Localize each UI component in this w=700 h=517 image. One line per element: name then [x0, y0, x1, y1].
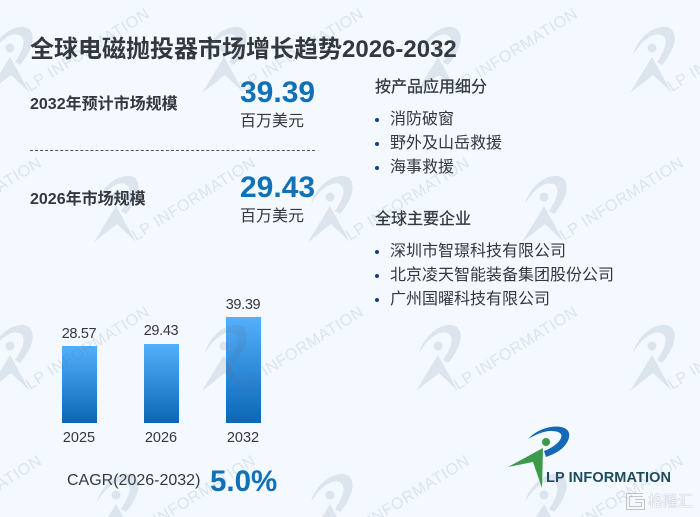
watermark pattern: LP INFORMATION	[557, 155, 687, 244]
CAGR callout	[67, 465, 277, 498]
stat: 2032 market size	[30, 76, 315, 130]
bar 2025: 2025	[63, 430, 95, 446]
watermark pattern: LP INFORMATION	[129, 155, 259, 244]
icon: G mark	[626, 493, 645, 510]
CAGR label: CAGR(2026-2032)	[67, 472, 200, 489]
brand logo	[508, 426, 671, 488]
stat label 2026: 2026年市场规模	[30, 191, 146, 208]
company list: 北京凌天智能装备集团股份公司	[390, 267, 614, 284]
segment list	[375, 110, 502, 176]
bar 2032: 39.39	[226, 297, 260, 313]
segments heading: 按产品应用细分	[375, 79, 487, 96]
source mark: 格隆汇	[648, 493, 693, 510]
watermark pattern: LP INFORMATION	[343, 155, 473, 244]
panel: key companies	[375, 210, 614, 308]
bar 2026	[144, 323, 179, 446]
source mark	[626, 492, 693, 510]
company list	[375, 242, 614, 308]
segment list: 野外及山岳救援	[390, 135, 502, 152]
stat unit 2032: 百万美元	[240, 113, 304, 130]
watermark pattern: LP INFORMATION	[23, 304, 153, 393]
watermark pattern: LP INFORMATION	[237, 304, 367, 393]
stat unit 2026: 百万美元	[240, 208, 304, 225]
watermark pattern: LP INFORMATION	[451, 304, 581, 393]
stat value 2032: 39.39	[240, 76, 315, 109]
company list: 深圳市智璟科技有限公司	[390, 243, 566, 260]
company list: 广州国曜科技有限公司	[390, 291, 550, 308]
bar chart	[62, 297, 261, 446]
stat value 2026: 29.43	[240, 171, 315, 204]
bar 2032	[226, 297, 261, 446]
watermark pattern: LP INFORMATION	[237, 6, 367, 95]
watermark pattern: LP INFORMATION	[23, 6, 153, 95]
bar 2026: 29.43	[144, 323, 178, 339]
stat: 2026 market size	[30, 171, 315, 225]
bar 2025	[62, 326, 97, 446]
bar 2026: 2026	[145, 430, 177, 446]
stat label 2032: 2032年预计市场规模	[30, 96, 178, 113]
panel: product segments	[375, 78, 502, 176]
bar 2025: 28.57	[62, 326, 96, 342]
segment list: 海事救援	[390, 159, 454, 176]
brand logo: LP INFORMATION	[546, 470, 671, 486]
CAGR value: 5.0%	[210, 465, 277, 498]
title: 全球电磁抛投器市场增长趋势2026-2032	[30, 36, 457, 63]
companies heading: 全球主要企业	[375, 211, 471, 228]
watermark pattern: LP INFORMATION	[451, 6, 581, 95]
segment list: 消防破窗	[390, 111, 454, 128]
bar 2032: 2032	[227, 430, 259, 446]
